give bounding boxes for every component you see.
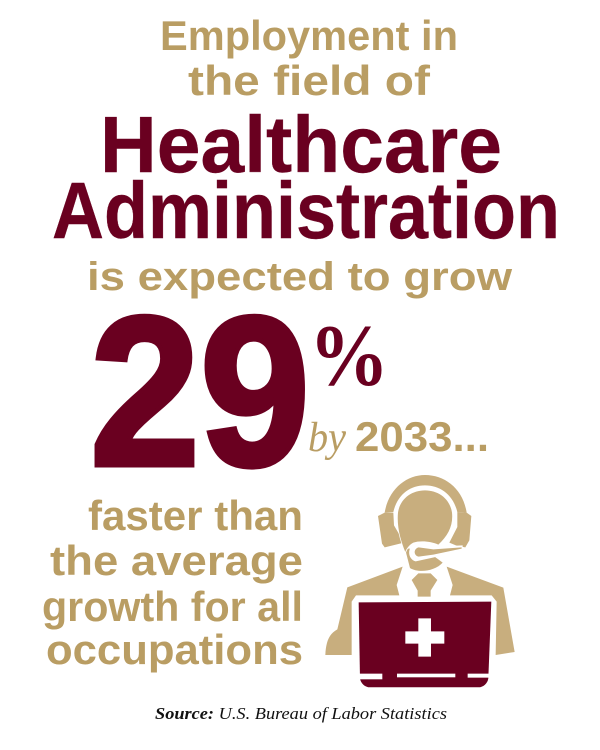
by 2033: by xyxy=(308,415,346,461)
head xyxy=(398,490,452,552)
comparison text: faster than xyxy=(88,492,303,539)
laptop xyxy=(359,602,491,687)
by 2033: 2033... xyxy=(355,413,489,460)
title: Healthcare Administration xyxy=(52,100,560,255)
comparison text: occupations xyxy=(46,626,303,673)
microphone xyxy=(409,544,463,561)
title: Healthcare Administration: Administration xyxy=(52,166,560,255)
by 2033 xyxy=(308,413,489,461)
title: Healthcare Administration: Healthcare xyxy=(100,100,502,189)
tie xyxy=(412,573,437,597)
intro heading: Employment in xyxy=(160,12,458,59)
ear cups xyxy=(378,513,404,547)
medical cross xyxy=(405,618,444,657)
comparison text: the average xyxy=(50,537,303,584)
comparison text xyxy=(42,492,303,673)
laptop hinge lines xyxy=(359,674,490,679)
jacket xyxy=(325,567,403,655)
intro heading xyxy=(160,12,458,104)
source line: Source: U.S. Bureau of Labor Statistics xyxy=(155,704,447,723)
intro heading: the field of xyxy=(188,57,431,104)
big number 29: 29 xyxy=(90,273,310,511)
percent sign: % xyxy=(309,308,389,405)
headset band xyxy=(385,475,467,513)
neck xyxy=(405,549,443,571)
headset and head xyxy=(378,475,471,571)
body and laptop xyxy=(325,567,515,687)
icon: call center agent with medical laptop xyxy=(325,475,515,687)
subheading: is expected to grow xyxy=(87,255,513,299)
comparison text: growth for all xyxy=(42,583,303,630)
